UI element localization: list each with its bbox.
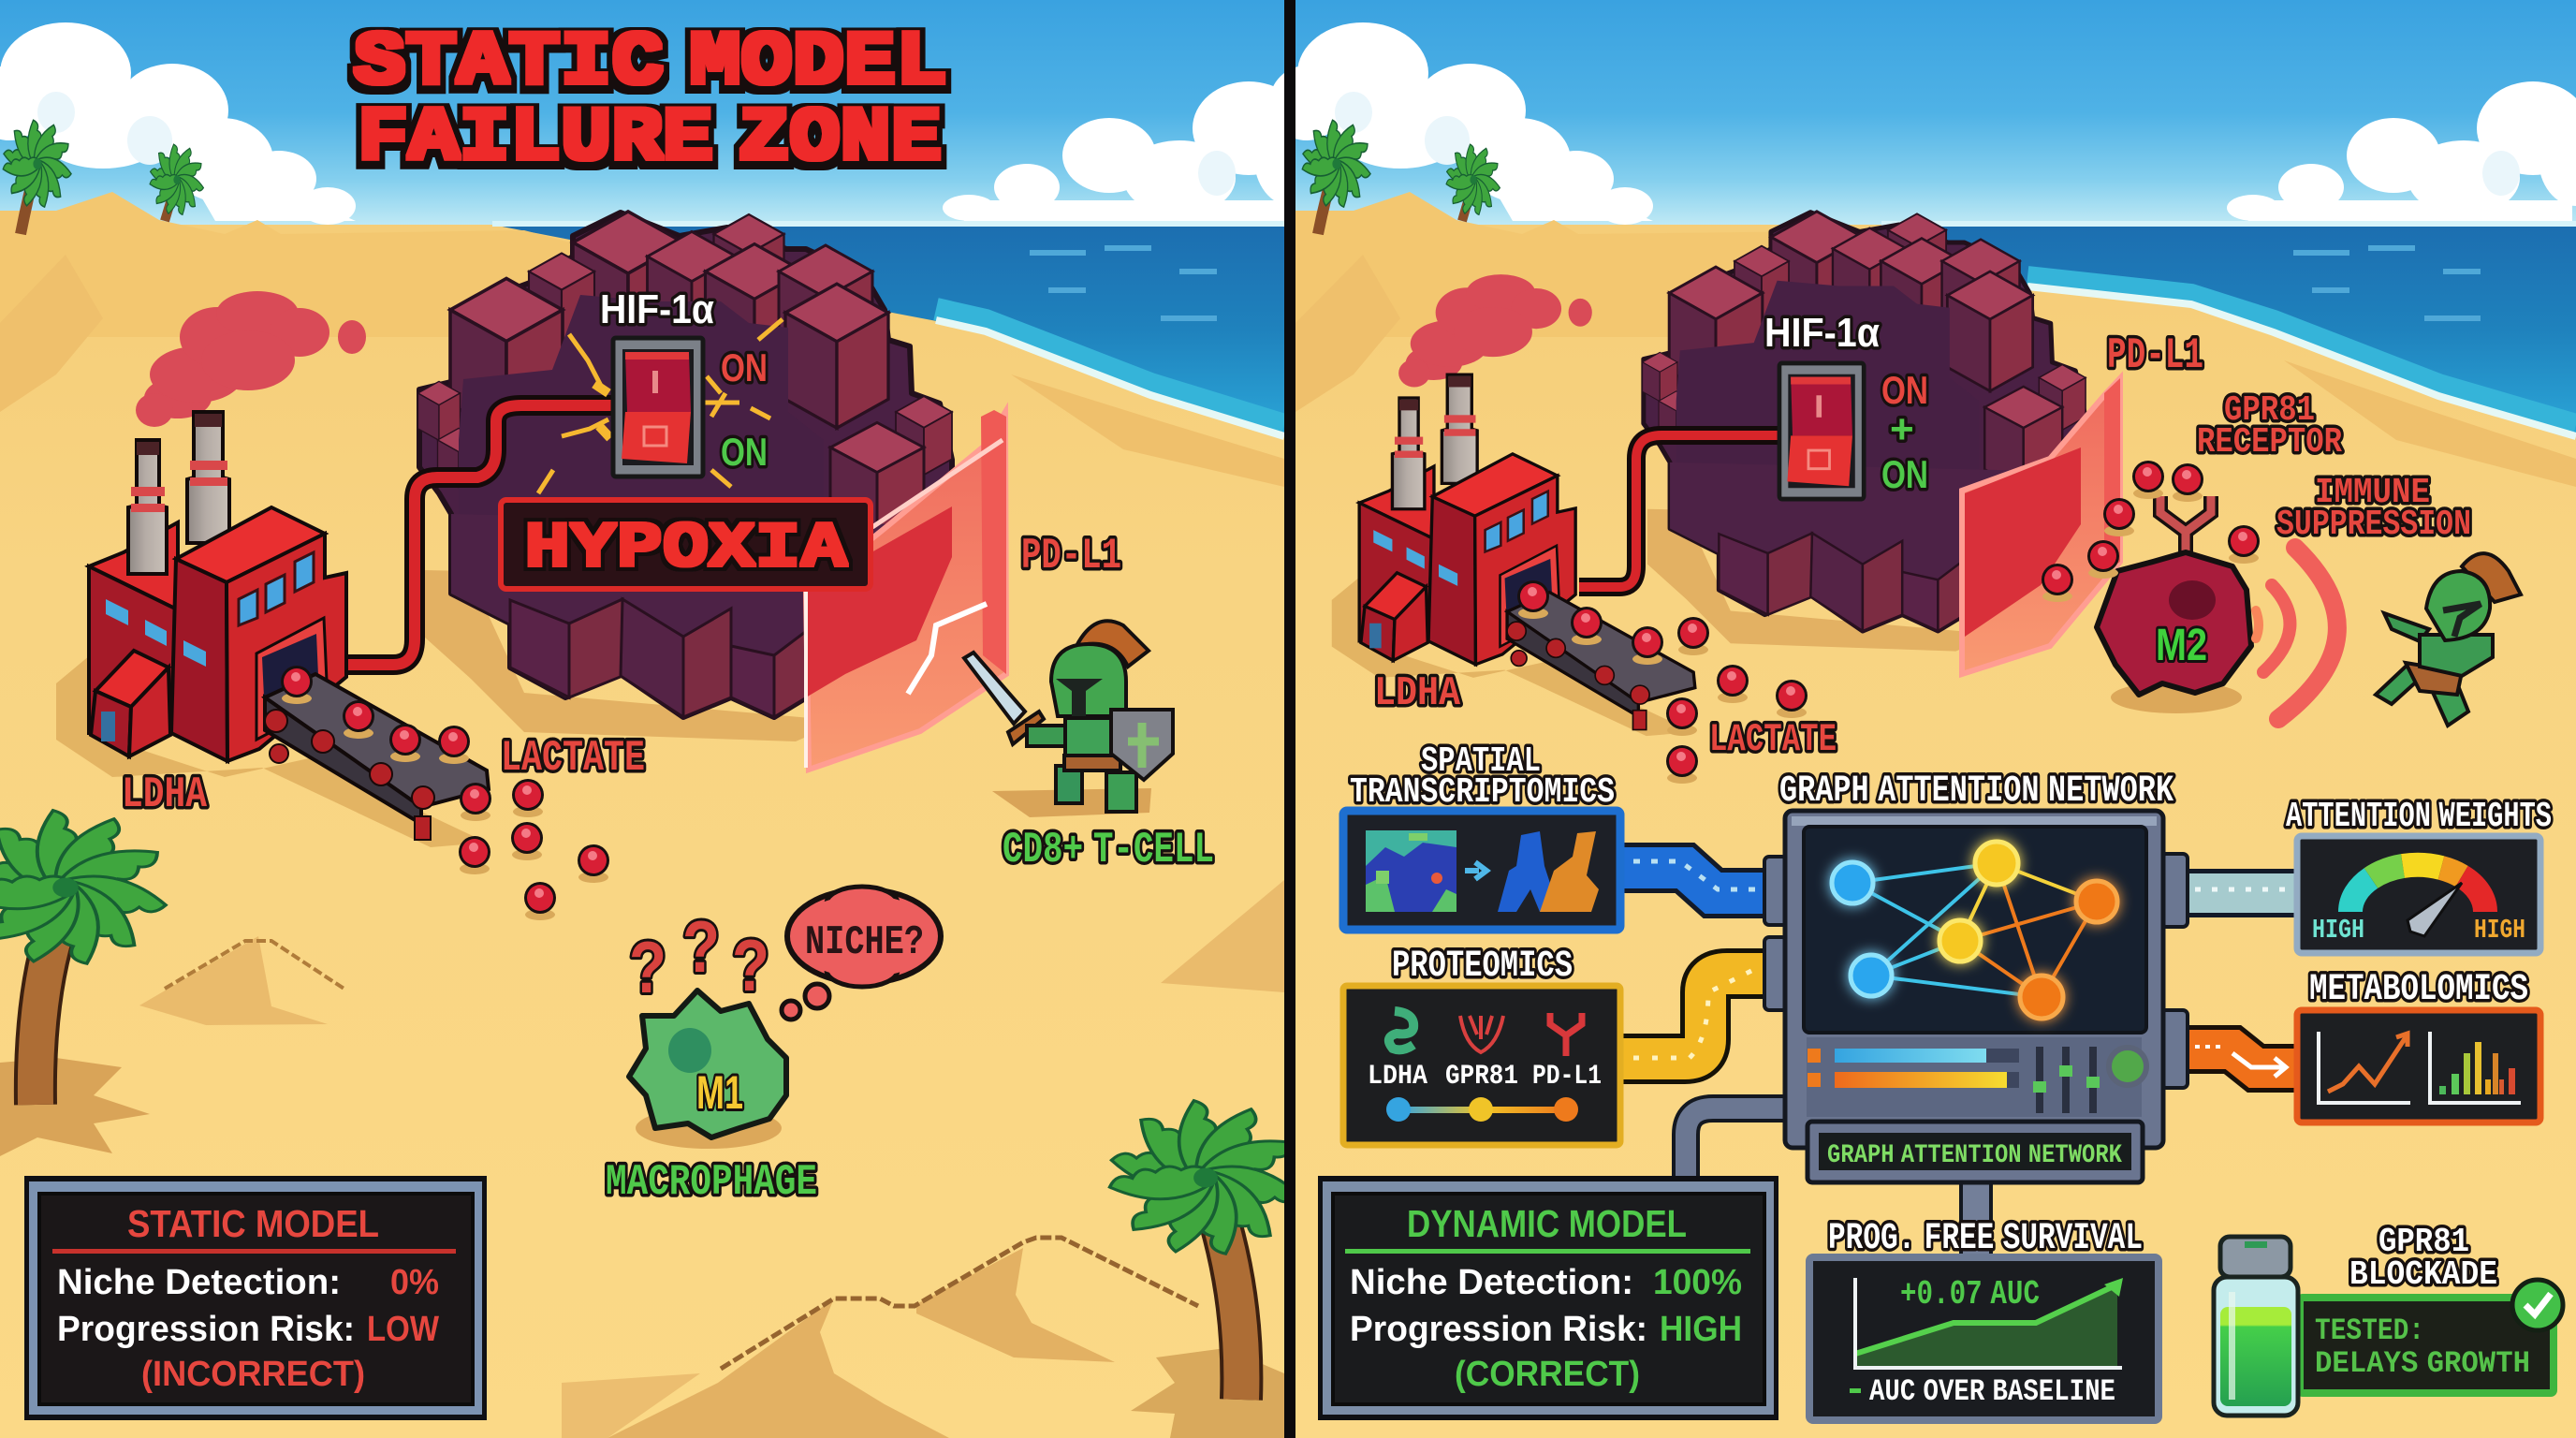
AUC gain: +0.07 AUC: [1900, 1275, 2040, 1313]
right edge dune: [1161, 880, 1284, 992]
M2 macrophage: [2097, 496, 2251, 713]
title: static model failure zone: [354, 21, 947, 182]
ocean: [1881, 225, 2576, 435]
survival chart: [1855, 1278, 2123, 1368]
T-cell repelled: [2376, 553, 2521, 726]
HIF-1 alpha switch: [1779, 363, 1864, 499]
correct verdict: (CORRECT): [1455, 1355, 1640, 1394]
network edges: [1852, 863, 2097, 997]
ocean: [492, 225, 1284, 435]
sand dunes at the top: [1295, 192, 1966, 337]
clouds: [0, 22, 1329, 225]
title: static model failure zone: FAILURE ZONE: [358, 96, 942, 182]
PD-L1 label: PD-L1: [2107, 331, 2203, 380]
GPR81 receptor label: GPR81: [2224, 390, 2315, 431]
heading: BLOCKADE: [2349, 1255, 2497, 1294]
dune shading: [1295, 255, 2576, 487]
question marks: ?: [629, 926, 666, 1008]
ON red: ON: [721, 345, 768, 389]
heading: [1350, 741, 1615, 813]
question marks: [629, 905, 769, 1008]
progression risk row: HIGH: [1660, 1310, 1742, 1349]
sky: [1295, 0, 2576, 225]
lactate molecules: [1517, 461, 2260, 784]
network name plate: [1808, 1122, 2143, 1182]
gauge labels: [2312, 915, 2525, 946]
central divider: [1284, 0, 1295, 1438]
panel: graph attention network machine: [1764, 770, 2188, 1182]
side connectors: [1764, 854, 2188, 1088]
immune suppression label: [2276, 473, 2471, 545]
clouds: [1269, 22, 2576, 225]
icon: check badge: [2512, 1280, 2563, 1330]
heading: PROG. FREE SURVIVAL: [1828, 1218, 2143, 1260]
LDHA label: LDHA: [1374, 670, 1461, 717]
incorrect verdict: (INCORRECT): [141, 1355, 365, 1394]
LACTATE label: LACTATE: [501, 734, 645, 783]
panel: metabolomics: [2297, 969, 2540, 1123]
result text: TESTED:: [2315, 1313, 2424, 1348]
network screen: [1804, 827, 2146, 1033]
network name plate: GRAPH ATTENTION NETWORK: [1827, 1141, 2122, 1170]
controls: [1807, 1037, 2146, 1117]
result text: DELAYS GROWTH: [2315, 1346, 2530, 1381]
tumour mass: [417, 212, 952, 741]
heading: METABOLOMICS: [2309, 969, 2528, 1011]
M1 macrophage: [629, 990, 786, 1149]
panel: GPR81 blockade: [2214, 1223, 2563, 1416]
big palm tree right: [1107, 1098, 1304, 1400]
pipe: spatial data: [1620, 861, 1769, 893]
ocean shallow and foam: [492, 221, 1284, 436]
HIF-1 alpha label: HIF-1α: [1764, 310, 1880, 356]
HIF-1 alpha switch: [613, 338, 703, 477]
gauge labels: HIGH: [2312, 915, 2364, 946]
segmented blue niche: [1498, 831, 1559, 912]
needle: [2408, 883, 2462, 936]
tumour mass: [1643, 212, 2086, 652]
icon: PD-L1 receptor: [1550, 1013, 1582, 1056]
factory: [56, 291, 489, 847]
sand dunes at the top: [0, 192, 580, 337]
thought bubble: [782, 887, 941, 1020]
scoreboard: static model: [24, 1176, 487, 1420]
ON green: ON: [721, 430, 768, 474]
PD-L1 label: PD-L1: [1021, 532, 1121, 580]
niche detection row: 100%: [1653, 1263, 1742, 1302]
segmented orange niche: [1540, 831, 1599, 912]
protein labels: GPR81: [1445, 1061, 1518, 1093]
heading: GPR81: [2378, 1223, 2469, 1261]
CD8+ T-cell label: CD8+ T-CELL: [1003, 826, 1214, 874]
bar chart: [2430, 1032, 2521, 1103]
small palm trees: [2, 119, 205, 234]
niche detection row: Niche Detection:: [57, 1263, 341, 1302]
small palm trees: [1301, 119, 1501, 234]
factory: [1332, 274, 1695, 736]
M2 macrophage: M2: [2156, 621, 2207, 670]
panel: static model failure zone: [0, 0, 1329, 1438]
grey pipes: [1686, 1108, 1976, 1259]
result text: [2315, 1313, 2530, 1381]
LACTATE label: LACTATE: [1709, 717, 1837, 762]
progression risk row: LOW: [367, 1310, 439, 1349]
icon: vial: [2214, 1237, 2298, 1416]
legend: AUC OVER BASELINE: [1869, 1374, 2115, 1409]
gauge: [2350, 865, 2485, 912]
dune shading: [0, 255, 1284, 487]
LDHA label: LDHA: [122, 770, 207, 819]
line chart: [2319, 1032, 2410, 1103]
pipe: metabolomics: [2181, 1047, 2303, 1077]
pipe from factory to switch: [1579, 435, 1783, 587]
M1 macrophage: M1: [696, 1066, 743, 1119]
question marks: ?: [682, 905, 720, 988]
small sand mound: [139, 936, 345, 1025]
scoreboard: dynamic model: [1318, 1176, 1778, 1420]
title: static model failure zone: STATIC MODEL: [354, 21, 947, 106]
plus sign: +: [1890, 406, 1914, 452]
network nodes: [1832, 842, 2117, 1019]
hypoxia banner: HYPOXIA: [524, 513, 847, 585]
scoreboard title: STATIC MODEL: [127, 1202, 379, 1245]
ON green: ON: [1881, 452, 1928, 496]
hypoxia banner: [501, 500, 871, 589]
sparks: [538, 319, 783, 493]
protein labels: PD-L1: [1532, 1061, 1602, 1093]
suppression waves: [2256, 548, 2337, 719]
lactate molecules: [281, 666, 609, 920]
ocean shallow and foam: [1881, 221, 2576, 436]
pipe: proteomics data: [1620, 969, 1769, 1059]
panel: proteomics: [1343, 946, 1620, 1145]
GPR81 receptor label: [2197, 390, 2342, 462]
niche detection row: Niche Detection:: [1350, 1263, 1633, 1302]
immune suppression label: SUPPRESSION: [2276, 505, 2471, 545]
ON red: ON: [1881, 368, 1928, 412]
immune suppression label: IMMUNE: [2315, 473, 2430, 513]
progression risk row: Progression Risk:: [1350, 1310, 1647, 1349]
panel: dynamic model success zone: [1269, 0, 2576, 1438]
scoreboard title: DYNAMIC MODEL: [1407, 1202, 1687, 1245]
pipe from factory to switch: [348, 405, 618, 665]
GPR81 receptor label: RECEPTOR: [2197, 422, 2342, 462]
protein labels: [1368, 1061, 1602, 1093]
protein link line: [1386, 1097, 1578, 1122]
tissue map: [1366, 830, 1456, 912]
thought bubble: NICHE?: [805, 919, 924, 966]
heading: SPATIAL: [1421, 741, 1541, 782]
panel: spatial transcriptomics: [1343, 741, 1620, 930]
PD-L1 shield: [806, 410, 1006, 770]
panel: attention weights: [2286, 797, 2552, 953]
arrow: [1465, 862, 1486, 879]
gauge labels: HIGH: [2474, 915, 2525, 946]
heading: [2349, 1223, 2497, 1294]
PD-L1 shield: [1962, 378, 2120, 674]
niche detection row: 0%: [390, 1263, 439, 1302]
progression risk row: Progression Risk:: [57, 1310, 355, 1349]
HIF-1 alpha label: HIF-1α: [600, 286, 714, 332]
heading: PROTEOMICS: [1392, 946, 1573, 988]
pipes connecting machine to panels: [1620, 861, 2303, 1259]
large dunes: [562, 1238, 1284, 1438]
icon: GPR81 receptor: [1460, 1016, 1503, 1052]
heading: TRANSCRIPTOMICS: [1350, 772, 1615, 813]
panel: progression free survival: [1809, 1218, 2159, 1420]
heading: GRAPH ATTENTION NETWORK: [1779, 770, 2174, 813]
big palm tree left: [0, 808, 170, 1156]
question marks: ?: [732, 924, 769, 1006]
macrophage label: MACROPHAGE: [606, 1158, 817, 1207]
pipe: attention weights: [2181, 889, 2303, 893]
icon: LDHA squiggle: [1389, 1011, 1413, 1049]
T-cell attacking with sword: [964, 621, 1173, 817]
protein labels: LDHA: [1368, 1061, 1427, 1093]
sky: [0, 0, 1284, 225]
